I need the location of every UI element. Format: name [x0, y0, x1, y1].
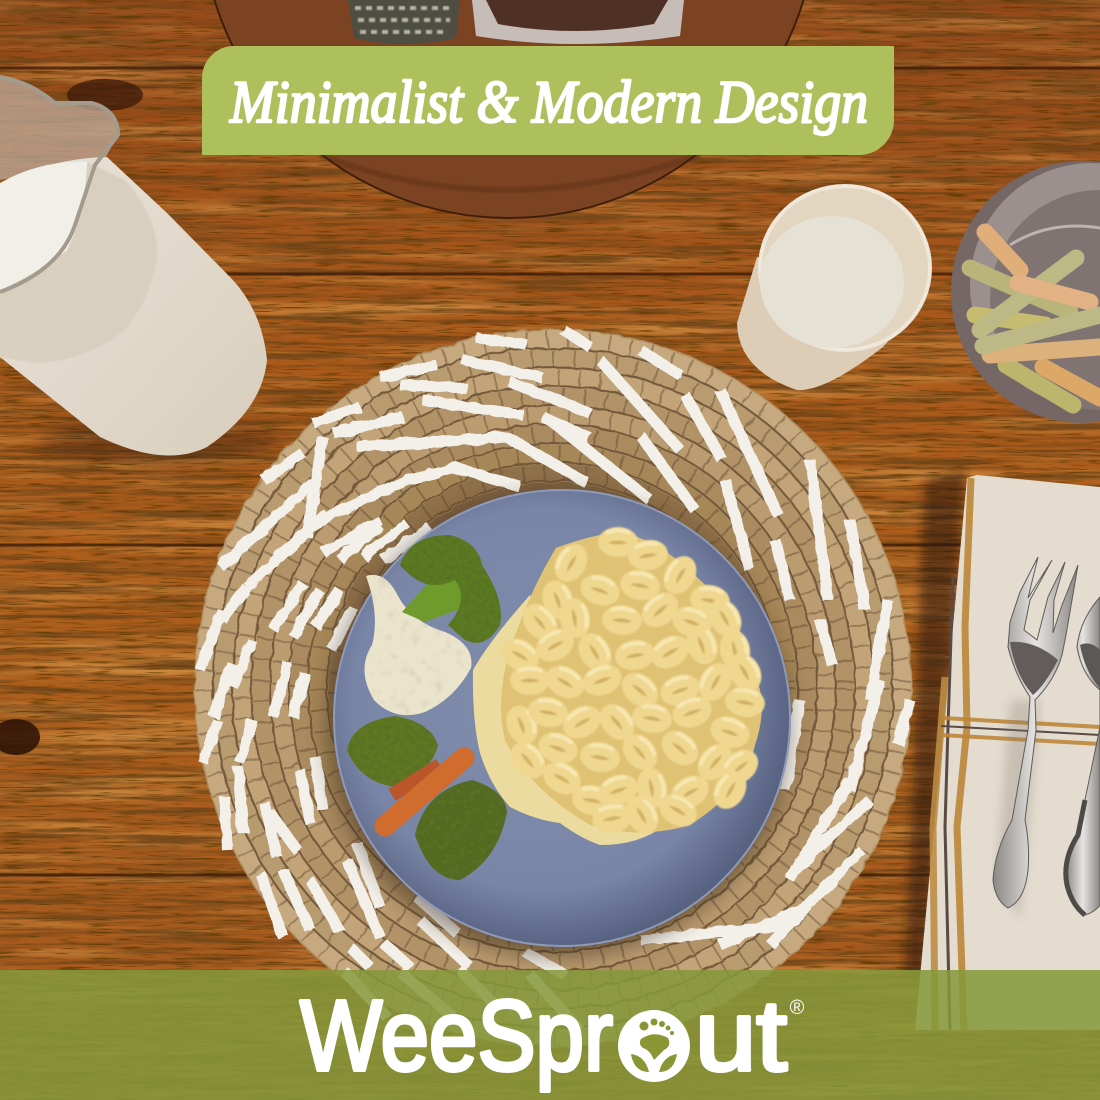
- glass tumblers at top: [348, 0, 684, 44]
- milk body: [0, 157, 267, 455]
- milk seen through inner glass: [0, 162, 157, 363]
- WeeSprout logo: [300, 980, 805, 1092]
- broccoli left: [347, 716, 438, 787]
- milk surface: [0, 162, 87, 290]
- heading text: Minimalist & Modern Design: [229, 69, 868, 135]
- fork: [993, 557, 1078, 920]
- paper cup of milk: [737, 184, 932, 390]
- glass rim: [0, 77, 118, 292]
- heading banner: [202, 46, 894, 155]
- logo wordmark left: WeeSpr: [300, 980, 613, 1092]
- broccoli top: [400, 535, 501, 643]
- spoon: [1066, 597, 1100, 915]
- cauliflower floret: [364, 575, 471, 715]
- rope coils: [194, 329, 912, 1047]
- glass spout: [0, 77, 118, 180]
- pitcher shadow: [40, 415, 280, 465]
- snack sticks: [970, 232, 1100, 405]
- woven placemat: [194, 329, 912, 1047]
- logo wordmark right: ut: [695, 980, 787, 1092]
- cheese sauce: [473, 595, 665, 845]
- registered mark: ®: [790, 997, 805, 1019]
- white strips: [200, 330, 910, 1030]
- bottom logo band: [0, 970, 1100, 1100]
- round wooden board: [201, 0, 817, 218]
- blue plate: [326, 489, 791, 958]
- broccoli bottom: [415, 780, 507, 880]
- logo icon: footprint sprout circle: [618, 1010, 690, 1082]
- macaroni shells with cheese sauce: [473, 527, 768, 845]
- pasta shells: [495, 527, 768, 840]
- milk pitcher: [0, 77, 280, 465]
- pasta mound base: [501, 532, 762, 832]
- carrot: [385, 758, 464, 826]
- folded napkin: [915, 475, 1100, 1030]
- snack bowl: [951, 161, 1100, 423]
